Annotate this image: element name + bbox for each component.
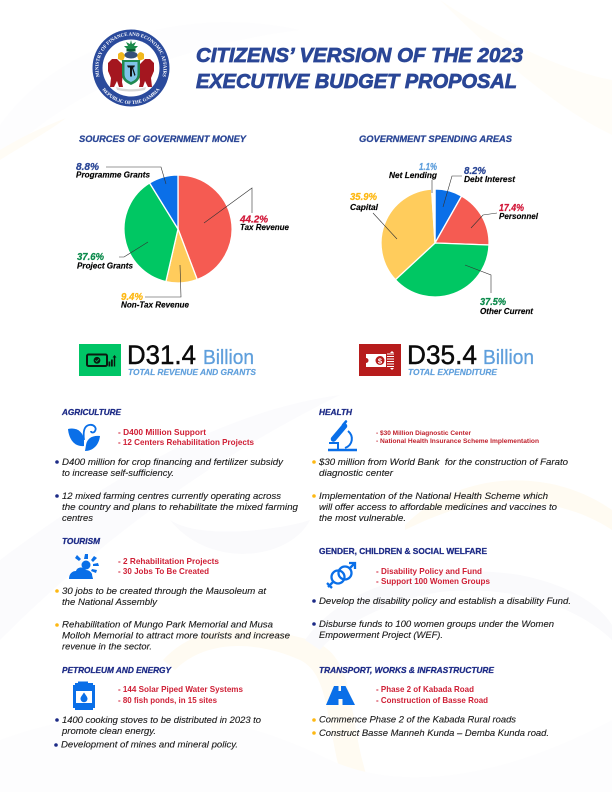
panel: petroleum and energy: [54, 666, 261, 750]
highlights: tourism: [118, 556, 219, 576]
bullet: diagnostic center: $30 million from World Bank for the construction of Farato: [318, 457, 568, 468]
label: non-tax revenue: 9.4%: [121, 292, 143, 303]
highlights: transport: - Phase 2 of Kabada Road: [376, 684, 474, 694]
bullet: rehabilitation: [55, 620, 290, 652]
panel: agriculture: [55, 408, 299, 524]
title: CITIZENS’ VERSION OF THE 2023: [196, 44, 524, 67]
panel: health: [312, 408, 568, 524]
label: capital: [350, 192, 379, 212]
icon: sun behind cloud: [69, 554, 99, 579]
highlights: gender: [376, 566, 490, 586]
label: tax revenue: 44.2%: [239, 214, 268, 226]
highlights: health: - $30 Million Diagnostic Center: [376, 430, 471, 437]
bullet: mixed farming: [55, 491, 299, 524]
label: personnel: [499, 203, 539, 221]
logo: Ministry of Finance seal: [92, 30, 170, 106]
bullet: jobs: [55, 586, 266, 608]
bullet: women groups: Empowerment Project (WEF).: [319, 630, 443, 641]
label: programme grants: 8.8%: [76, 162, 99, 173]
label: debt interest: Debt Interest: [464, 175, 515, 184]
amount: D31.4 Billion: Billion: [203, 346, 254, 369]
coat of arms: [108, 40, 154, 92]
bullet: crop financing: to increase self-sufficiency.: [62, 468, 174, 479]
label: capital: 35.9%: [350, 192, 377, 203]
amount: D35.4 Billion: [407, 340, 534, 370]
bullet: crop financing: [55, 457, 284, 479]
leader lines: spending: [373, 176, 497, 293]
heading: petroleum: PETROLEUM AND ENERGY: [62, 666, 173, 675]
panel: government spending areas: [350, 134, 539, 316]
panel: gender, children and social welfare: [312, 547, 571, 641]
pie chart: sources: [124, 175, 232, 283]
bullet: Basse road: Construct Basse Manneh Kunda – Demba Kunda road.: [319, 728, 549, 739]
label: net lending: 1.1%: [419, 162, 437, 173]
icon: banknote: $: [378, 356, 383, 365]
bullet: cooking stoves: promote clean energy.: [61, 726, 156, 737]
panel: tourism: [55, 537, 290, 652]
highlights: gender: - Disability Policy and Fund: [376, 566, 482, 576]
bullet: diagnostic center: [312, 457, 568, 479]
icon: money with chart: [79, 344, 121, 376]
pie chart: spending: [381, 189, 489, 297]
label: total expenditure: TOTAL EXPENDITURE: [408, 368, 498, 377]
highlights: petroleum: [118, 684, 243, 705]
label: personnel: Personnel: [499, 212, 539, 221]
label: project grants: Project Grants: [77, 262, 134, 270]
title: [196, 44, 524, 93]
icon: plant: [68, 425, 100, 451]
label: capital: Capital: [350, 203, 379, 212]
bullet: women groups: [312, 619, 554, 641]
heading: gender: GENDER, CHILDREN & SOCIAL WELFARE: [319, 547, 488, 556]
label: personnel: 17.4%: [499, 203, 524, 214]
label: programme grants: Programme Grants: [76, 170, 151, 180]
label: tax revenue: Tax Revenue: [240, 223, 290, 232]
bullet: women groups: Disburse funds to 100 women groups under the Women: [319, 619, 554, 630]
highlights: petroleum: - 144 Solar Piped Water Systems: [118, 684, 243, 694]
bullet: Kabada roads: Commence Phase 2 of the Kabada Rural roads: [319, 714, 516, 726]
amount: D31.4 Billion: D31.4: [127, 340, 196, 370]
heading: agriculture: AGRICULTURE: [61, 408, 122, 417]
heading: sources: SOURCES OF GOVERNMENT MONEY: [79, 134, 247, 144]
label: other current: [480, 297, 533, 316]
label: tax revenue: [239, 214, 290, 232]
icon: gender symbols: [327, 563, 355, 588]
highlights: gender: - Support 100 Women Groups: [376, 576, 490, 586]
highlights: petroleum: - 80 fish ponds, in 15 sites: [118, 695, 217, 705]
label: programme grants: [76, 162, 151, 180]
heading: spending: GOVERNMENT SPENDING AREAS: [359, 134, 512, 144]
leader lines: sources: [106, 167, 252, 297]
amount: D35.4 Billion: D35.4: [407, 340, 477, 370]
bullet: health scheme: the most vulnerable.: [319, 513, 406, 524]
amount: D31.4 Billion: [127, 340, 254, 370]
bullet: health scheme: will offer access to affordable medicines and vaccines to: [319, 502, 557, 513]
highlights: agriculture: [118, 427, 254, 447]
label: debt interest: 8.2%: [464, 166, 486, 177]
heading: health: HEALTH: [319, 408, 353, 417]
bullet: jobs: the National Assembly: [62, 597, 158, 608]
bullet: cooking stoves: [55, 715, 261, 737]
bullet: mixed farming: centres: [62, 513, 93, 524]
highlights: health: [376, 430, 539, 445]
label: total revenue and grants: TOTAL REVENUE AND GRANTS: [128, 368, 257, 377]
highlights: agriculture: - D400 Million Support: [118, 427, 206, 437]
highlights: transport: [376, 684, 488, 705]
bullet: mixed farming: 12 mixed farming centres currently operating across: [62, 491, 281, 502]
bullet: jobs: 30 jobs to be created through the Mausoleum at: [62, 586, 266, 597]
bullet: cooking stoves: 1400 cooking stoves to be distributed in 2023 to: [62, 715, 261, 726]
title: EXECUTIVE BUDGET PROPOSAL: [196, 70, 517, 93]
icon: banknote: [359, 344, 401, 376]
icon: road: [326, 686, 355, 705]
bullet: diagnostic center: diagnostic center: [319, 468, 394, 479]
seal ring text bottom: REPUBLIC OF THE GAMBIA: [102, 88, 160, 104]
heading: tourism: TOURISM: [62, 537, 100, 546]
bullet: rehabilitation: Rehabilitation of Mungo Park Memorial and Musa: [62, 620, 273, 630]
label: non-tax revenue: [121, 292, 190, 310]
bullet: health scheme: Implementation of the National Health Scheme which: [319, 491, 548, 502]
heading: transport: TRANSPORT, WORKS & INFRASTRUCTURE: [319, 666, 495, 675]
label: project grants: [77, 252, 134, 270]
highlights: tourism: - 30 Jobs To Be Created: [118, 566, 209, 576]
highlights: tourism: - 2 Rehabilitation Projects: [118, 556, 219, 566]
seal ring text top: MINISTRY OF FINANCE AND ECONOMIC AFFAIRS: [95, 32, 167, 78]
icon: barrel: [73, 682, 95, 710]
bullet: mixed farming: the country and plans to rehabilitate the mixed farming: [62, 502, 299, 513]
bullet: health scheme: [312, 491, 557, 524]
label: net lending: Net Lending: [389, 171, 437, 180]
label: other current: Other Current: [480, 307, 533, 316]
highlights: transport: - Construction of Basse Road: [376, 695, 488, 705]
bullet: disability policy: Develop the disability policy and establish a disability Fund.: [319, 596, 571, 607]
label: non-tax revenue: Non-Tax Revenue: [121, 300, 190, 310]
label: project grants: 37.6%: [77, 252, 104, 263]
icon: microscope: [328, 422, 357, 450]
highlights: health: - National Health Insurance Scheme Implementation: [376, 438, 539, 445]
total revenue callout: [79, 340, 257, 377]
label: debt interest: [464, 166, 515, 184]
label: other current: 37.5%: [480, 297, 506, 308]
bullet: mines policy: Development of mines and mineral policy.: [61, 740, 238, 750]
panel: transport, works and infrastructure: [312, 666, 549, 739]
bullet: rehabilitation: Molloh Memorial to attract more tourists and increase: [62, 630, 290, 642]
panel: sources of government money: [76, 134, 290, 310]
label: net lending: [389, 162, 437, 180]
bullet: crop financing: D400 million for crop financing and fertilizer subsidy: [62, 457, 284, 468]
bullet: rehabilitation: revenue in the sector.: [62, 642, 152, 652]
amount: D35.4 Billion: Billion: [483, 346, 534, 369]
highlights: agriculture: - 12 Centers Rehabilitation Projects: [118, 437, 254, 447]
total expenditure callout: [359, 340, 534, 377]
